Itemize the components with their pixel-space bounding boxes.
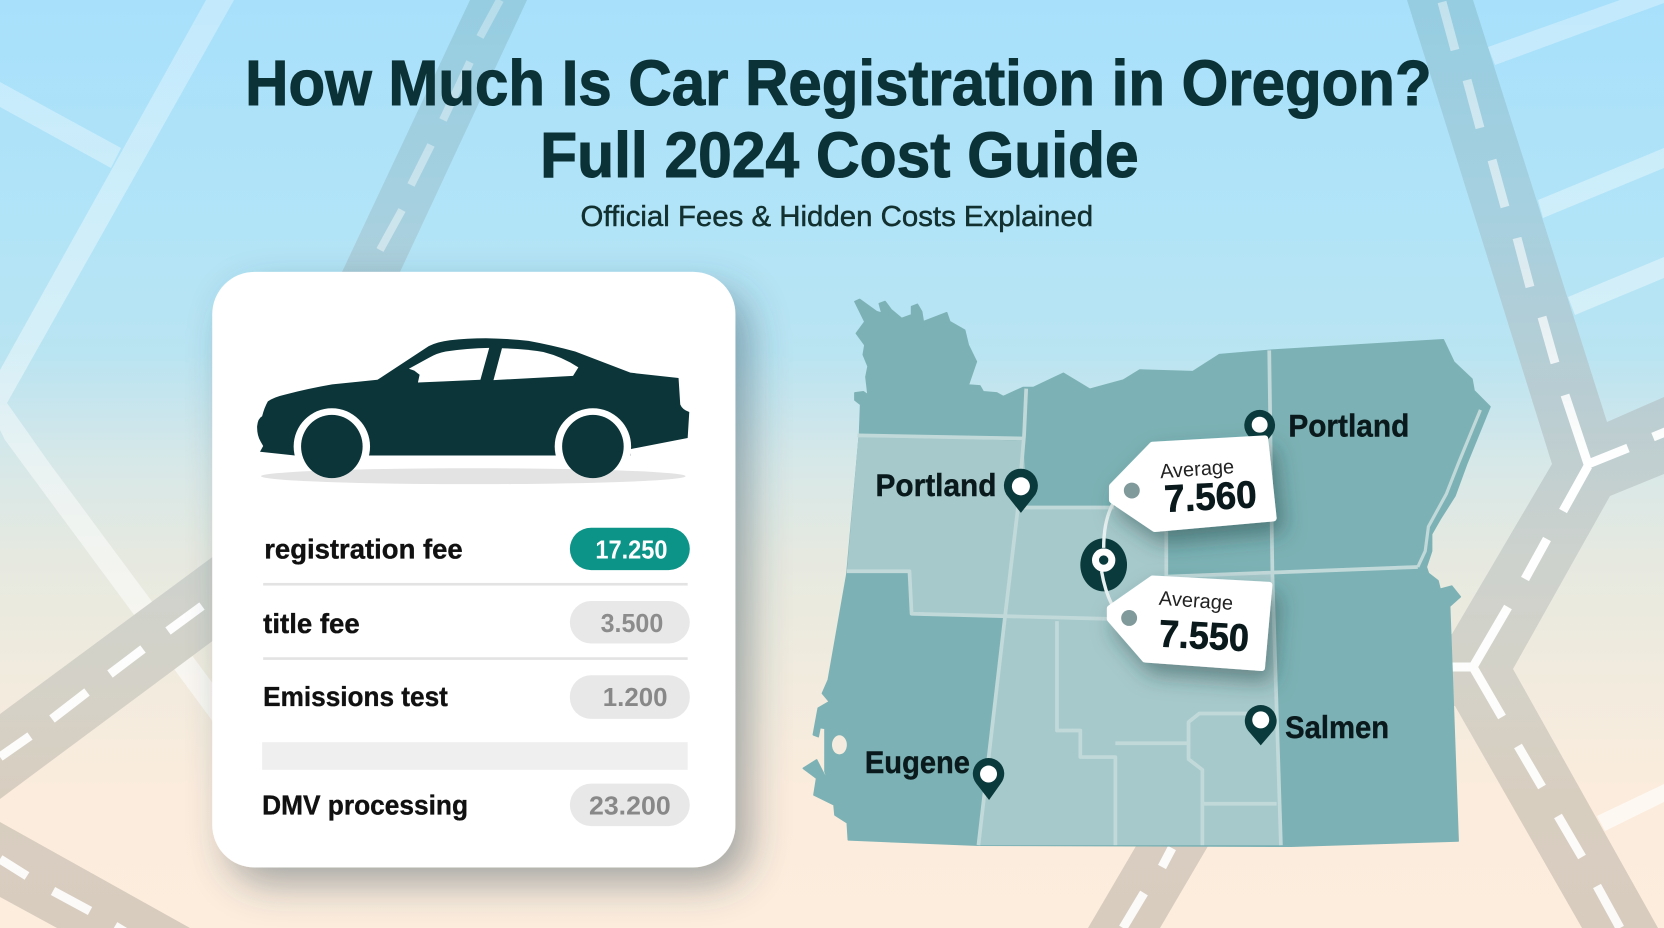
pin: Salmen [1245,705,1277,745]
panel: fee card [212,272,735,867]
row: DMV processing: DMV processing [262,789,468,820]
price tag: lower [1110,579,1269,668]
map: county borders [847,350,1480,845]
map: state outline [803,299,1490,846]
title: How Much Is Car Registration in Oregon? [245,48,1432,119]
map of Oregon [803,299,1490,846]
row: registration fee: 17.250 [595,536,668,565]
row: title fee [263,601,690,643]
pin: Portland west [1004,469,1038,513]
empty row bar [262,742,688,770]
card background [212,272,735,867]
price tag: lower: 7.550 [1158,612,1250,660]
label: Portland west: Portland [876,467,996,503]
icon: car silhouette [257,338,689,485]
row: registration fee: registration fee [264,533,463,565]
price tag: lower: Average [1158,588,1234,615]
subtitle: Official Fees & Hidden Costs Explained [580,201,1093,233]
label: Salmen: Salmen [1285,709,1389,745]
row: emissions test: Emissions test [263,681,448,712]
price tag: upper: 7.560 [1163,473,1258,521]
row: emissions test: 1.200 [603,684,668,712]
pin: central location with tag string [1080,503,1127,605]
title [245,48,1432,191]
row: title fee: 3.500 [601,610,663,638]
price tag: upper [1112,439,1273,529]
row: title fee: title fee [263,608,360,639]
row: emissions test [263,675,690,719]
pin: Portland east [1244,410,1275,450]
row: registration fee [264,528,690,570]
title: Full 2024 Cost Guide [540,120,1139,191]
label: Portland east: Portland [1288,407,1409,443]
price tag: upper: Average [1159,456,1235,483]
label: Eugene: Eugene [865,744,970,780]
map: lake [832,735,847,754]
row: DMV processing [262,784,690,826]
map: lighter counties [847,435,1281,845]
row: DMV processing: 23.200 [589,792,671,820]
pin: Eugene [973,758,1004,800]
